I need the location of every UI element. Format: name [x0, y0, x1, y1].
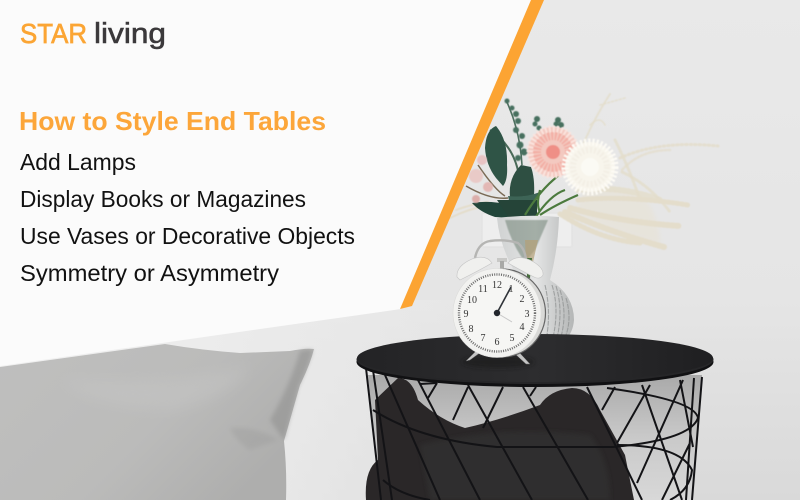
- logo: STAR living: [20, 18, 166, 50]
- light switch plate on wall: [482, 213, 572, 247]
- list of styling tips: Add Lamps: [20, 149, 136, 175]
- list of styling tips: Use Vases or Decorative Objects: [20, 223, 355, 249]
- clock numerals: 4: [520, 322, 524, 333]
- clock hands: [497, 287, 511, 313]
- clock bells: [457, 257, 492, 280]
- clock numerals: 7: [480, 333, 486, 344]
- clock numerals: 11: [478, 284, 488, 295]
- clock numerals: 12: [492, 280, 502, 291]
- clock numerals: 2: [520, 294, 524, 305]
- alarm clock: [453, 240, 546, 364]
- white text panel: [0, 0, 531, 366]
- list of styling tips: Symmetry or Asymmetry: [20, 260, 280, 286]
- clock numerals: 1: [508, 284, 514, 295]
- bouquet: pink chrysanthemum: [528, 127, 578, 177]
- clock handle: [475, 240, 526, 262]
- heading: How to Style End Tables: [19, 106, 326, 136]
- clock numerals: 8: [468, 324, 474, 335]
- clock face: [459, 274, 535, 352]
- bouquet stems and leaves: [466, 98, 578, 222]
- clock body: [453, 268, 541, 358]
- list of styling tips: [20, 149, 355, 286]
- clock numerals: 6: [494, 337, 500, 348]
- grey pillow: [0, 344, 314, 500]
- clock numerals: [464, 280, 530, 348]
- bouquet wisps: cream pampas: [450, 94, 718, 247]
- wire frame: [366, 368, 702, 500]
- clock numerals: 9: [464, 309, 468, 320]
- list of styling tips: Display Books or Magazines: [20, 186, 306, 212]
- dark cushion: [366, 378, 634, 500]
- orange diagonal stripe: [400, 0, 544, 309]
- bouquet: white chrysanthemum: [565, 142, 615, 192]
- side table: wire basket and cushion: [366, 368, 702, 500]
- clock body side: [458, 269, 546, 357]
- shadowed wall seen through basket: [368, 375, 702, 500]
- logo: STAR living: living: [94, 18, 166, 50]
- clock numerals: 10: [467, 295, 477, 306]
- side table: round black top: [356, 334, 714, 387]
- clock feet: [466, 350, 530, 364]
- clock numerals: 5: [510, 333, 514, 344]
- glass vase: [497, 216, 574, 349]
- logo: STAR living: STAR: [20, 18, 87, 49]
- clock numerals: 3: [524, 309, 530, 320]
